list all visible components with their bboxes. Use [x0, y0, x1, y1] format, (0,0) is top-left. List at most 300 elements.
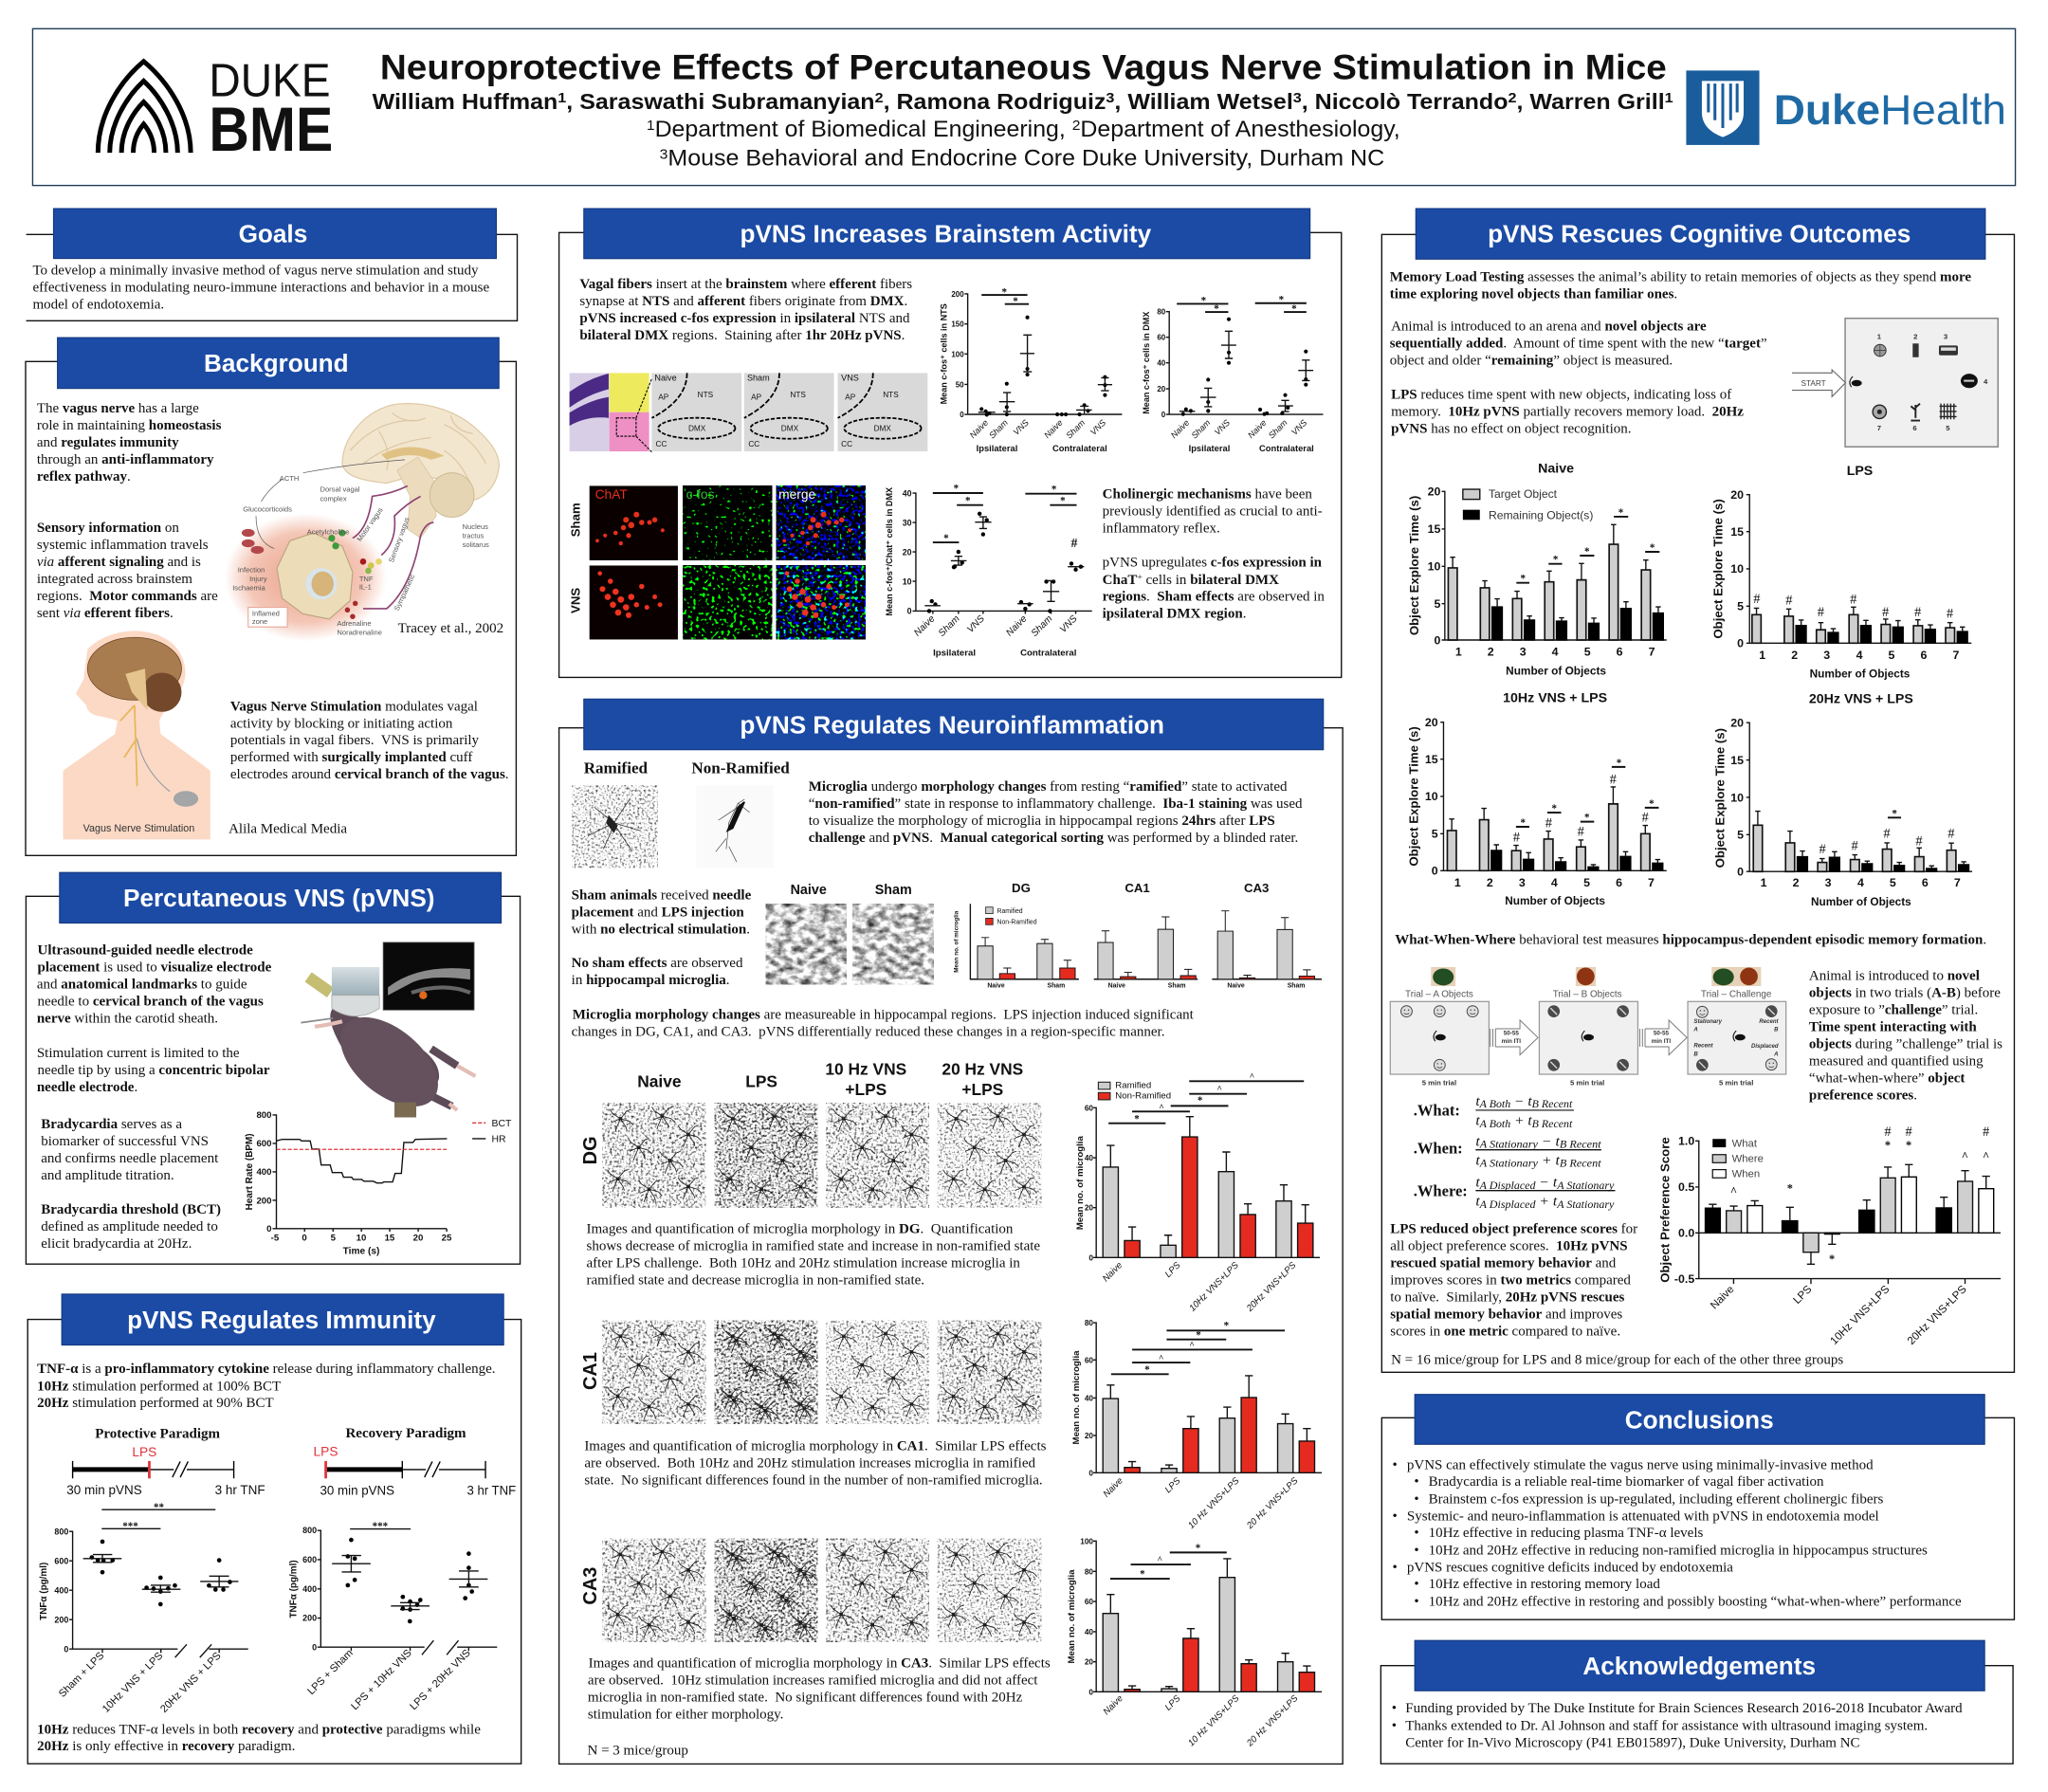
formulas: what, when, where: + t	[1538, 1153, 1561, 1168]
text: bradycardia: biomarker of successful VNS	[41, 1134, 209, 1149]
heading: conclusions: Conclusions	[1625, 1405, 1774, 1434]
formulas: what, when, where: t	[1475, 1114, 1479, 1129]
microglia morphology examples: Ramified	[584, 759, 649, 777]
text: sham animals: with no electrical stimulation.	[572, 922, 750, 937]
chart: naive memory load: 0	[1435, 633, 1441, 647]
text: vagus nerve stimulation: performed with surgically implanted cuff	[230, 750, 472, 765]
conclusions list: 10Hz and 20Hz effective in restoring and possibly boosting “what-when-where” performance	[1429, 1594, 1962, 1609]
text: vagus nerve: and regulates immunity	[37, 435, 179, 450]
chart: object preference score: Naive	[1709, 1284, 1737, 1311]
formulas: what, when, where: B Recent	[1560, 1140, 1602, 1151]
conclusions list: •	[1414, 1543, 1419, 1558]
illustration: mouse with ultrasound probe	[301, 942, 475, 1124]
chart: 10Hz VNS + LPS memory load: 2	[1487, 876, 1493, 889]
chart: c-fos cells in DMX: 0	[1161, 411, 1166, 419]
chart: naive memory load: 10	[1428, 560, 1441, 574]
fluorescence micrographs: ChAT, c-fos, merge: VNS	[569, 588, 583, 613]
text: ultrasound-guided placement: needle tip by using a concentric bipolar	[38, 1063, 270, 1078]
formulas: what, when, where: B Recent	[1532, 1099, 1573, 1110]
text: vagal fibers	[579, 277, 912, 343]
text: TNF intro: 20Hz stimulation performed at 90% BCT	[37, 1396, 274, 1411]
text: microglia morphology	[809, 779, 1303, 846]
conclusions list: 10Hz effective in reducing plasma TNF-α levels	[1429, 1526, 1704, 1541]
diagram: what-when-where trials: 5 min trial	[1570, 1078, 1604, 1087]
chart: CA3 microglia	[1067, 1537, 1322, 1749]
chart: c-fos and ChAT double positive: *	[1051, 484, 1057, 495]
text: challenge trial: Animal is introduced to novel	[1809, 968, 1980, 983]
chart: c-fos and ChAT double positive: #	[1070, 536, 1077, 550]
chart: object preference score: *	[1829, 1253, 1835, 1266]
chart: LPS memory load: #	[1850, 593, 1856, 608]
chart: CA3 microglia: 80	[1085, 1567, 1093, 1576]
text: morphology changes: changes in DG, CA1, and CA3. pVNS differentially reduced these changes in a region-specific manner.	[572, 1024, 1164, 1039]
chart: object preference score: #	[1884, 1125, 1892, 1140]
text: memory load testing: Animal is introduced to an arena and novel objects are	[1391, 320, 1707, 335]
chart: naive memory load: *	[1553, 555, 1559, 566]
conclusions list: Systemic- and neuro-inflammation is attenuated with pVNS in endotoxemia model	[1407, 1509, 1879, 1524]
chart: CA3 microglia: *	[1140, 1568, 1145, 1580]
diagram: what-when-where trials: Stationary	[1693, 1019, 1723, 1025]
chart: c-fos cells in DMX: Contralateral	[1259, 444, 1314, 453]
chart legend: HR	[492, 1135, 506, 1145]
panel: goals	[27, 209, 518, 320]
chart: c-fos cells in NTS: *	[1001, 286, 1007, 298]
chart: 20Hz VNS + LPS memory load: 0	[1737, 866, 1744, 879]
conclusions list: Bradycardia is a reliable real-time biomarker of vagal fiber activation	[1429, 1474, 1824, 1490]
timeline: protective paradigm: LPS	[132, 1445, 156, 1459]
text: memory load testing: sequentially added. Amount of time spent with the new “target”	[1390, 337, 1767, 352]
chart: TNF protective: TNFα (pg/ml)	[39, 1563, 49, 1620]
chart: DG microglia: LPS	[1163, 1260, 1183, 1280]
chart: TNF protective: 10Hz VNS + LPS	[101, 1650, 165, 1715]
text: memory load testing: memory. 10Hz pVNS partially recovers memory load. 20Hz	[1391, 405, 1744, 420]
arrow: inter-trial interval 1	[1490, 1020, 1538, 1055]
text: TNF intro: TNF-α is a pro-inflammatory cytokine release during inflammatory challenge.	[37, 1362, 496, 1377]
diagram: memory load arena: 4	[1984, 377, 1988, 386]
heading: pVNS: Percutaneous VNS (pVNS)	[123, 884, 434, 912]
chart: TNF protective: **	[154, 1502, 165, 1513]
chart: sham vs naive microglia: Sham	[1288, 983, 1305, 990]
chart: 10Hz VNS + LPS memory load: Number of Objects	[1505, 894, 1605, 907]
chart: object preference score: ^	[1730, 1184, 1737, 1198]
acknowledgements list: •	[1392, 1718, 1397, 1733]
chart: naive memory load	[1407, 461, 1667, 678]
chart: naive memory load: 2	[1488, 646, 1494, 659]
panel: acknowledgements	[1381, 1640, 2013, 1764]
chart: LPS memory load: #	[1785, 593, 1792, 608]
chart: CA3 microglia: LPS	[1163, 1693, 1183, 1713]
chart: CA1 microglia: 60	[1085, 1356, 1093, 1364]
text: memory load testing: object and older “remaining” object is measured.	[1390, 354, 1673, 369]
text: vagal fibers: synapse at NTS and afferent fibers originate from DMX.	[579, 294, 907, 309]
affiliations: 3	[660, 146, 667, 162]
text: ultrasound-guided placement	[37, 943, 272, 1095]
text: sham animals	[572, 887, 752, 988]
chart: CA3 microglia: 100	[1080, 1537, 1093, 1545]
illustration: inflammatory reflex brain diagram: Ischaemia	[232, 584, 265, 593]
text: challenge trial: objects during ”challenge” trial is	[1809, 1036, 2002, 1051]
chart: c-fos cells in NTS: 0	[960, 411, 964, 419]
illustration: inflammatory reflex brain diagram: Nucleus	[463, 522, 488, 531]
chart: DG microglia: ^	[1159, 1103, 1164, 1113]
chart legend	[1712, 1138, 1764, 1180]
formulas: what, when, where: B Recent	[1532, 1119, 1573, 1130]
text: bradycardia: and confirms needle placement	[41, 1151, 219, 1166]
chart: CA1 microglia	[1071, 1319, 1322, 1531]
chart: DG microglia: ^	[1216, 1085, 1222, 1095]
chart: CA3 microglia: ^	[1157, 1555, 1162, 1565]
logo: Duke BME: DUKE	[209, 53, 331, 106]
text: sensory information: regions. Motor commands are	[37, 589, 218, 604]
chart: c-fos cells in NTS: 150	[951, 320, 964, 329]
text: cholinergic mechanisms: inflammatory reflex.	[1103, 521, 1220, 537]
text: sensory information: systemic inflammation travels	[37, 538, 209, 553]
text: memory load testing: pVNS has no effect on object recognition.	[1391, 422, 1632, 437]
text: LPS preference scores: to naïve. Similarly, 20Hz pVNS rescues	[1390, 1290, 1624, 1306]
chart: c-fos cells in DMX: 60	[1157, 334, 1166, 342]
chart: c-fos cells in DMX: *	[1279, 295, 1285, 306]
chart legend	[986, 907, 1037, 925]
affiliations	[647, 117, 1400, 171]
header banner	[32, 28, 2016, 186]
chart: TNF protective: 400	[54, 1585, 68, 1595]
goals text	[32, 263, 489, 312]
chart: CA3 microglia: 60	[1085, 1598, 1093, 1606]
chart: 10Hz VNS + LPS memory load: *	[1552, 803, 1558, 814]
text: cholinergic mechanisms: +	[1137, 573, 1143, 583]
chart: heart rate: 800	[256, 1110, 272, 1121]
panel: brainstem activity	[559, 209, 1342, 677]
chart: TNF protective	[39, 1502, 248, 1715]
text: TNF intro: 10Hz stimulation performed at 100% BCT	[37, 1379, 281, 1394]
chart: 10Hz VNS + LPS memory load: 7	[1648, 876, 1655, 889]
panel: cognitive outcomes	[1381, 209, 2014, 1372]
conclusions list	[1392, 1457, 1962, 1609]
chart: LPS memory load	[1710, 464, 1971, 680]
text: sham animals: in hippocampal microglia.	[572, 973, 730, 988]
illustration: inflammatory reflex brain diagram: TNF	[359, 575, 374, 583]
chart: c-fos cells in DMX: *	[1201, 295, 1207, 306]
text: what-when-where intro: What-When-Where behavioral test measures hippocampus-dependent episodic memory formation.	[1395, 933, 1986, 948]
affiliations: Department of Anesthesiology,	[1080, 117, 1400, 142]
chart legend	[472, 1119, 512, 1145]
formulas: what, when, where: A Displaced	[1479, 1199, 1536, 1211]
chart: sham vs naive microglia: Sham	[1168, 983, 1186, 990]
conclusions list: •	[1392, 1509, 1398, 1524]
chart: c-fos and ChAT double positive	[885, 484, 1092, 659]
chart: DG microglia: Naive	[1101, 1260, 1125, 1284]
chart: c-fos and ChAT double positive: *	[943, 533, 949, 544]
authors: , Warren Grill	[1517, 89, 1665, 114]
chart: naive memory load: 5	[1435, 597, 1441, 611]
chart: c-fos and ChAT double positive: Mean c-fos⁺/Chat⁺ cells in DMX	[885, 487, 894, 616]
chart: 10Hz VNS + LPS memory load: *	[1649, 798, 1655, 810]
chart: CA1 microglia: *	[1224, 1321, 1230, 1332]
text: DG	[587, 1222, 1040, 1289]
chart: object preference score: *	[1885, 1139, 1891, 1152]
text: cholinergic mechanisms: cells	[1143, 573, 1172, 588]
illustration: inflammatory reflex brain diagram: Inflamed	[252, 610, 280, 618]
chart: 10Hz VNS + LPS memory load: 1	[1454, 876, 1461, 889]
text: DG: Images and quantification of microglia morphology in DG. Quantification	[587, 1222, 1014, 1237]
text: vagal fibers: pVNS increased c-fos expression in ipsilateral NTS and	[579, 311, 910, 326]
chart: 20Hz VNS + LPS memory load: 20	[1730, 716, 1744, 729]
chart: c-fos and ChAT double positive: VNS	[1058, 613, 1080, 635]
chart: object preference score: *	[1787, 1182, 1793, 1196]
timeline: protective paradigm: Protective Paradigm	[95, 1427, 221, 1442]
chart legend: Non-Ramified	[1115, 1090, 1171, 1101]
chart: c-fos cells in NTS: VNS	[1088, 418, 1107, 437]
heading: background	[58, 338, 499, 389]
chart: naive memory load: *	[1618, 507, 1624, 519]
chart: c-fos cells in DMX: *	[1291, 303, 1297, 315]
text: challenge trial: objects in two trials (A-B) before	[1809, 985, 2001, 1000]
chart: CA1 microglia: *	[1144, 1364, 1150, 1376]
chart: naive memory load: 20	[1428, 485, 1441, 499]
chart: heart rate: 25	[442, 1234, 452, 1244]
chart: CA1 microglia: LPS	[1163, 1475, 1183, 1495]
illustration: inflammatory reflex brain diagram: complex	[320, 494, 347, 503]
text: vagus nerve: role in maintaining homeostasis	[37, 418, 222, 433]
chart: DG microglia: Mean no. of microglia	[1075, 1136, 1086, 1230]
chart legend: What	[1732, 1138, 1758, 1149]
authors: , William Wetsel	[1114, 89, 1293, 114]
chart: CA1 microglia: 40	[1085, 1394, 1093, 1402]
arrow: inter-trial interval 2: min ITI	[1652, 1038, 1671, 1045]
chart: 10Hz VNS + LPS memory load: #	[1578, 825, 1584, 840]
chart: 10Hz VNS + LPS memory load: *	[1584, 813, 1590, 824]
chart: CA1 microglia: *	[1196, 1329, 1201, 1341]
conclusions list: 10Hz and 20Hz effective in reducing non-ramified microglia in hippocampus structures	[1429, 1543, 1928, 1558]
chart: c-fos and ChAT double positive: Naive	[912, 613, 938, 638]
formulas: what, when, where: + t	[1510, 1114, 1533, 1129]
text: LPS preference scores: spatial memory behavior and improves	[1390, 1307, 1622, 1323]
authors: , Ramona Rodriguiz	[884, 89, 1106, 114]
chart: CA1 microglia: 20 Hz VNS+LPS	[1244, 1475, 1301, 1531]
chart: CA1 microglia: 10 Hz VNS+LPS	[1186, 1475, 1242, 1531]
text: CA1: state. No significant differences found in the number of non-ramified microglia.	[584, 1472, 1043, 1488]
diagram: what-when-where trials: Trial – Challenge	[1701, 989, 1772, 999]
column labels: 20 Hz VNS	[942, 1059, 1023, 1078]
histology strip: c-fos in NTS and DMX: VNS	[841, 374, 859, 383]
text: LPS preference scores: N = 16 mice/group for LPS and 8 mice/group for each of the other three groups	[1391, 1352, 1843, 1367]
chart: 10Hz VNS + LPS memory load: #	[1513, 830, 1520, 845]
chart: 10Hz VNS + LPS memory load: 20	[1425, 716, 1438, 729]
chart: c-fos and ChAT double positive: 20	[903, 547, 912, 557]
chart: 10Hz VNS + LPS memory load: 6	[1616, 876, 1622, 889]
micrographs: naive and sham: Naive	[791, 883, 827, 898]
formulas: what, when, where: A Stationary	[1556, 1199, 1614, 1211]
chart legend	[1098, 1080, 1171, 1101]
conclusions list: •	[1414, 1491, 1419, 1507]
chart: object preference score: -0.5	[1674, 1272, 1694, 1286]
chart: LPS memory load: 5	[1889, 649, 1895, 662]
illustration: inflammatory reflex brain diagram: Sympathetic	[393, 573, 417, 613]
micrographs: CA1	[580, 1321, 1041, 1424]
chart: TNF protective: 0	[64, 1644, 68, 1654]
micrographs: CA3	[580, 1539, 1041, 1642]
chart: object preference score: ^	[1983, 1149, 1989, 1162]
chart: LPS memory load: Number of Objects	[1810, 667, 1911, 680]
chart legend: Non-Ramified	[997, 919, 1037, 925]
logo: Duke Health	[1686, 70, 2006, 145]
text: vagus nerve stimulation: Vagus Nerve Stimulation modulates vagal	[230, 699, 478, 714]
diagram: memory load arena: 6	[1912, 424, 1917, 432]
chart: 20Hz VNS + LPS memory load: #	[1852, 839, 1858, 854]
chart: c-fos and ChAT double positive: *	[1060, 495, 1066, 506]
text: bradycardia: defined as amplitude needed to	[41, 1219, 218, 1234]
text: microglia morphology: Microglia undergo morphology changes from resting “ramified” state to activated	[809, 779, 1288, 795]
chart: LPS memory load: 6	[1921, 649, 1928, 662]
chart: 20Hz VNS + LPS memory load: 5	[1737, 829, 1744, 842]
chart: 20Hz VNS + LPS memory load: #	[1819, 842, 1826, 857]
fluorescence micrographs: ChAT, c-fos, merge: Sham	[569, 503, 583, 537]
chart legend: Ramified	[997, 908, 1023, 915]
chart: LPS memory load: 3	[1823, 649, 1830, 662]
text: cholinergic mechanisms: pVNS upregulates c-fos expression in	[1103, 556, 1323, 571]
chart: heart rate: 0	[266, 1224, 272, 1234]
chart: LPS memory load: 0	[1737, 637, 1744, 650]
chart: naive memory load: *	[1584, 546, 1590, 558]
chart: sham vs naive microglia: Sham	[1048, 983, 1065, 990]
chart: TNF recovery: LPS + 10Hz VNS	[349, 1648, 414, 1712]
chart: c-fos and ChAT double positive: 30	[903, 518, 912, 527]
acknowledgements list: Thanks extended to Dr. Al Johnson and staff for assistance with ultrasound imaging system.	[1405, 1718, 1928, 1733]
chart: 10Hz VNS + LPS memory load: *	[1617, 758, 1622, 769]
text: bradycardia: elicit bradycardia at 20Hz.	[41, 1236, 192, 1252]
text: DG: ramified state and decrease microglia in non-ramified state.	[587, 1273, 924, 1289]
text: ultrasound-guided placement: placement is used to visualize electrode	[38, 960, 272, 976]
text: challenge trial: exposure to ”challenge” trial.	[1809, 1002, 1978, 1017]
chart legend: When	[1732, 1169, 1760, 1180]
histology strip: c-fos in NTS and DMX: AP	[658, 393, 669, 402]
chart: c-fos cells in DMX	[1142, 295, 1323, 453]
chart: naive memory load: 1	[1455, 646, 1462, 659]
chart: CA1 microglia: 80	[1085, 1319, 1093, 1327]
text: ultrasound-guided placement: needle to cervical branch of the vagus	[38, 995, 264, 1010]
affiliations: 1	[647, 118, 655, 134]
formulas: what, when, where: A Displaced	[1479, 1180, 1536, 1192]
formulas: what, when, where: t	[1475, 1195, 1479, 1210]
chart: CA3 microglia: 10 Hz VNS+LPS	[1186, 1693, 1242, 1748]
text: challenge trial: measured and quantified using	[1809, 1053, 1984, 1069]
chart: LPS memory load: 20	[1730, 488, 1744, 502]
conclusions list: pVNS rescues cognitive deficits induced by endotoxemia	[1407, 1560, 1733, 1575]
panel: conclusions	[1381, 1395, 2014, 1619]
chart: CA3 microglia: 40	[1085, 1628, 1093, 1637]
illustration: inflammatory reflex brain diagram: solitarus	[463, 540, 489, 549]
illustration: inflammatory reflex brain diagram: Glucocorticoids	[243, 504, 292, 513]
chart: 10Hz VNS + LPS memory load: Object Explore Time (s)	[1407, 726, 1421, 867]
heading: cognitive outcomes: pVNS Rescues Cognitive Outcomes	[1488, 220, 1911, 248]
chart: TNF protective: 800	[54, 1527, 68, 1536]
acknowledgements list: •	[1392, 1701, 1397, 1716]
text: sham animals: Sham animals received needle	[572, 887, 752, 903]
formulas: what, when, where: t	[1475, 1153, 1479, 1168]
chart legend: Ramified	[1115, 1080, 1151, 1090]
illustration: inflammatory reflex brain diagram: Noradrenaline	[337, 628, 382, 636]
text: sensory information	[37, 521, 218, 621]
text: LPS preference scores: rescued spatial memory behavior and	[1390, 1256, 1617, 1271]
diagram: memory load arena: 1	[1877, 332, 1882, 340]
text: morphology changes	[572, 1007, 1195, 1039]
chart: c-fos cells in NTS: Naive	[968, 418, 990, 440]
chart: c-fos cells in NTS: Ipsilateral	[977, 444, 1017, 453]
diagram: memory load arena: 7	[1877, 424, 1881, 432]
chart: c-fos cells in NTS: VNS	[1012, 418, 1031, 437]
formulas: what, when, where: t	[1475, 1176, 1479, 1191]
timeline: recovery paradigm	[314, 1426, 516, 1498]
text: TNF intro	[37, 1362, 496, 1411]
chart: 20Hz VNS + LPS memory load: Number of Objects	[1811, 895, 1911, 908]
chart: c-fos cells in NTS: Sham	[1064, 417, 1087, 441]
conclusions list: pVNS can effectively stimulate the vagus nerve using minimally-invasive method	[1407, 1457, 1874, 1472]
authors: 1	[558, 90, 566, 106]
authors: , Niccolò Terrando	[1302, 89, 1509, 114]
column labels: +LPS	[845, 1080, 887, 1099]
acknowledgements list	[1392, 1701, 1963, 1750]
illustration: inflammatory reflex brain diagram: Dorsal vagal	[320, 485, 360, 494]
chart: c-fos and ChAT double positive: Contralateral	[1020, 649, 1076, 659]
heading: conclusions	[1415, 1395, 1984, 1444]
chart: object preference score: 0.0	[1678, 1227, 1694, 1240]
timeline: protective paradigm: 30 min pVNS	[66, 1483, 142, 1497]
chart: CA3 microglia: Naive	[1102, 1693, 1125, 1717]
chart: heart rate: Heart Rate (BPM)	[245, 1133, 255, 1210]
chart: c-fos cells in DMX: 80	[1157, 308, 1166, 317]
text: bradycardia: and amplitude titration.	[41, 1168, 174, 1183]
chart: c-fos cells in NTS: Naive	[1042, 418, 1065, 440]
chart: c-fos cells in NTS	[940, 286, 1122, 453]
diagram: memory load arena: 2	[1913, 332, 1917, 340]
formulas: what, when, where: t	[1475, 1134, 1479, 1149]
diagram: what-when-where trials: A	[1692, 1027, 1698, 1033]
chart: CA3 microglia: *	[1196, 1543, 1201, 1554]
micrographs: DG	[580, 1103, 1041, 1208]
chart: LPS memory load: 4	[1856, 649, 1863, 662]
formulas: what, when, where: A Both	[1479, 1119, 1511, 1130]
illustration: inflammatory reflex brain diagram: Infection	[238, 565, 265, 574]
histology strip: c-fos in NTS and DMX: CC	[841, 440, 852, 448]
authors: William Huffman	[373, 89, 546, 114]
chart: c-fos cells in NTS: Sham	[987, 417, 1010, 441]
chart: heart rate: 15	[385, 1234, 395, 1244]
text: challenge trial: “what-when-where” object	[1809, 1070, 1965, 1086]
fluorescence micrographs: ChAT, c-fos, merge: merge	[778, 487, 816, 502]
chart: 10Hz VNS + LPS memory load: #	[1610, 773, 1617, 788]
diagram: what-when-where trials: Recent	[1759, 1019, 1780, 1025]
diagram: memory load arena: 5	[1946, 424, 1950, 432]
text: CA3: N = 3 mice/group	[587, 1744, 688, 1759]
heading: acknowledgements	[1415, 1640, 1984, 1691]
chart: c-fos cells in NTS: *	[1013, 296, 1018, 307]
chart: LPS memory load: #	[1947, 607, 1953, 622]
text: sensory information: integrated across brainstem	[37, 572, 192, 587]
illustration: inflammatory reflex brain diagram: IL-1	[359, 582, 372, 591]
chart legend	[1463, 487, 1593, 522]
text: sham animals: placement and LPS injection	[572, 905, 744, 920]
text: DG: shows decrease of microglia in ramified state and increase in non-ramified state	[587, 1239, 1040, 1254]
chart: object preference score: 1.0	[1678, 1135, 1694, 1148]
timeline: recovery paradigm: 3 hr TNF	[466, 1484, 516, 1498]
fluorescence micrographs: ChAT, c-fos, merge: ChAT	[595, 487, 628, 502]
diagram: what-when-where trials: 5 min trial	[1422, 1078, 1456, 1087]
chart: CA1 microglia: 0	[1088, 1469, 1093, 1477]
arrow: inter-trial interval 1: min ITI	[1502, 1038, 1521, 1045]
chart: sham vs naive microglia: CA3	[1244, 881, 1269, 895]
formulas: what, when, where: A Stationary	[1479, 1140, 1538, 1151]
illustration: inflammatory reflex brain diagram: Acetylcholine	[307, 527, 349, 536]
